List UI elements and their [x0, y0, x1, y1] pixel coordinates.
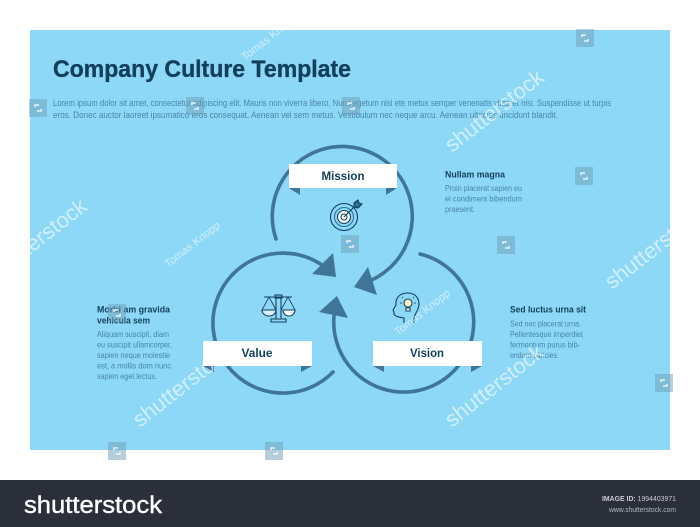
text block: Sed luctus: endum ultricies.: [510, 351, 559, 360]
footer image id: IMAGE ID: 1994403971: [602, 494, 676, 503]
icon: head with light bulb: [393, 293, 419, 323]
intro text: Lorem ipsum dolor sit amet, consectetur adipiscing elit. Mauris non viverra libero. Nunc egetum nisi ete metus semper venenatis vitae et nisi. Suspendisse ut turpis: [53, 98, 611, 108]
text block: Morbi: Aliquam suscipit, diam: [97, 330, 169, 339]
intro text: eros. Donec auctor laoreet ipsumatico eros consequat. Aenean vel sem metus. Vestibulum nec neque arcu. Aenean ultricies tincidunt blandit.: [53, 110, 558, 120]
watermark text: shutterstock: [440, 64, 549, 157]
cycle diagram: [203, 146, 482, 393]
text block: Morbi: eu suscipit ullamcorper,: [97, 340, 172, 350]
watermark text: shutterstock: [440, 339, 549, 432]
watermark text: shutterstock: [128, 339, 237, 432]
watermark tiles: [29, 29, 673, 460]
icon: balance scales: [262, 295, 295, 322]
title: Company Culture Template: [53, 56, 351, 83]
text block: Nullam magna: praesent.: [445, 205, 475, 214]
icon: target with dart: [330, 200, 362, 230]
watermark text: [0, 12, 700, 432]
text block: Sed luctus: Pellentesque imperdiet: [510, 330, 584, 339]
banner: value: [203, 341, 312, 372]
text block: Sed luctus: [510, 304, 586, 360]
text block: Morbi: sapien eget lectus.: [97, 372, 157, 381]
text block: Sed luctus: Sed luctus urna sit: [510, 304, 586, 314]
text block: Morbi: vehicula sem: [97, 316, 150, 326]
banner: mission: [289, 164, 397, 195]
footer url: www.shutterstock.com: [608, 507, 676, 514]
text block: Morbi: sapien neque molestie: [97, 351, 170, 360]
watermark text: Tomas Knopp: [392, 287, 453, 338]
text block: Nullam magna: Proin placerat sapien eu: [445, 184, 522, 193]
intro text: [53, 98, 611, 120]
text block: Sed luctus: Sed nec placerat urna.: [510, 320, 581, 328]
footer bar: [0, 480, 700, 527]
banner: vision: Vision: [410, 346, 444, 360]
text block: Morbi: Morbi am gravida: [97, 304, 170, 314]
banner: value: Value: [242, 346, 273, 360]
banner: mission: Mission: [322, 169, 364, 183]
arc arrow: vision: [319, 254, 474, 392]
text block: Nullam magna: el condiment bibendum: [445, 194, 522, 204]
banner: vision: [373, 341, 482, 372]
watermark text: Tomas Knopp: [162, 219, 223, 270]
text block: Morbi: est, a mollis dom nunc: [97, 362, 171, 370]
arc arrow: value: [213, 253, 336, 393]
text block: Nullam magna: [445, 170, 522, 214]
footer logo: shutterstock: [24, 492, 163, 519]
arc arrow: mission: [272, 146, 412, 295]
text block: Morbi: [97, 304, 172, 381]
text block: Nullam magna: Nullam magna: [445, 170, 505, 180]
panel: blue background: [30, 30, 670, 450]
text block: Sed luctus: fermentum purus bib-: [510, 340, 580, 350]
watermark text: Tomas Knopp: [239, 12, 300, 63]
